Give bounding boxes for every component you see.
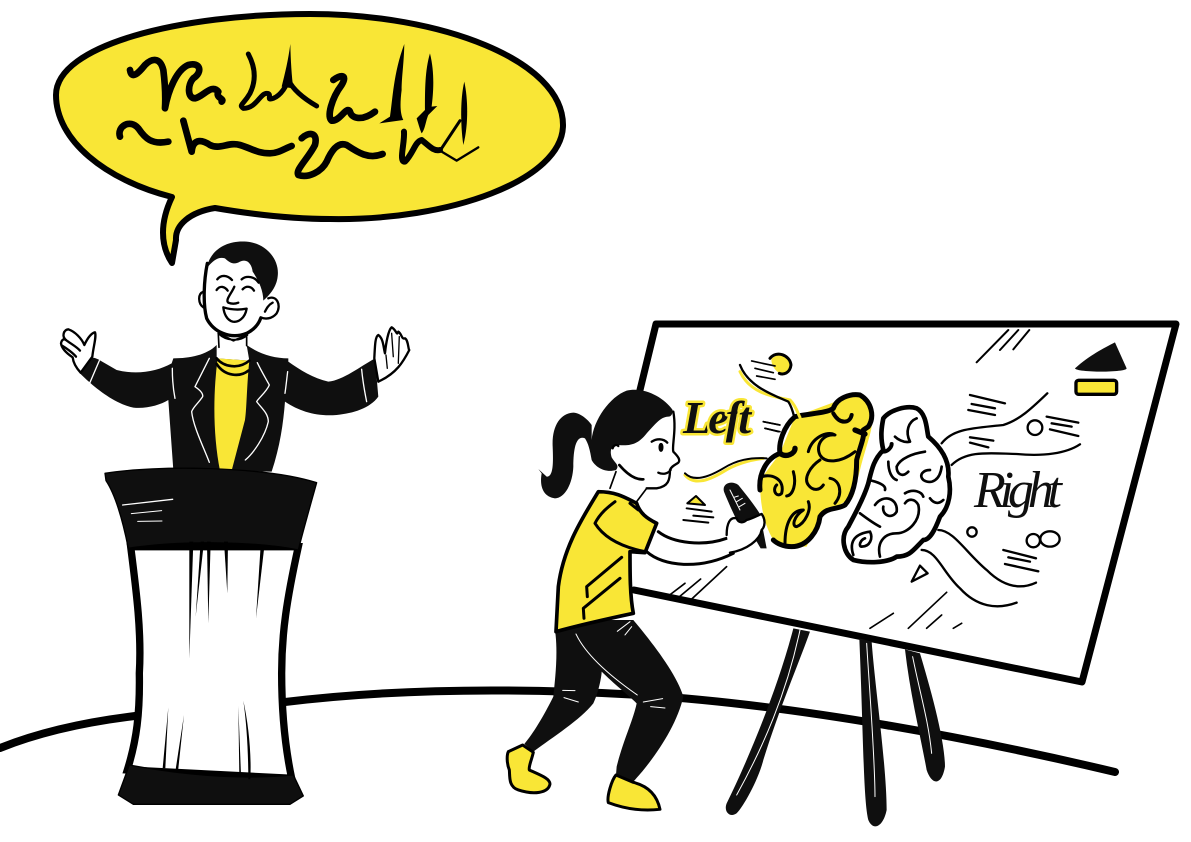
presentation board — [634, 324, 1176, 682]
presenter man — [61, 241, 409, 472]
right connectors — [942, 393, 1047, 443]
hatch marks — [668, 422, 780, 600]
head and face — [199, 241, 279, 347]
diagram lines and marks on board — [740, 353, 1080, 628]
legs and shoes — [507, 620, 683, 810]
right brain lobe — [844, 407, 950, 562]
Right label: Right — [973, 462, 1064, 519]
podium — [105, 468, 317, 804]
right lobe swirls — [852, 418, 943, 557]
left lobe swirls — [762, 413, 865, 543]
artist woman — [507, 390, 780, 810]
face — [610, 412, 679, 502]
yellow dot icon — [770, 353, 791, 374]
yellow connector — [740, 365, 800, 417]
ponytail and hair — [538, 390, 673, 498]
left brain lobe — [760, 395, 873, 547]
podium base — [118, 765, 303, 804]
small circles — [967, 420, 1060, 547]
easel legs — [726, 628, 945, 826]
ground line — [0, 690, 1115, 772]
podium highlights — [123, 499, 173, 521]
yellow wave line — [685, 458, 767, 481]
Left label: Left — [682, 392, 752, 443]
board icon: house shape — [1075, 342, 1127, 394]
triangle — [912, 566, 928, 582]
scribbled speech text — [119, 44, 478, 176]
speech bubble — [56, 14, 563, 263]
shirt — [556, 492, 657, 632]
jacket highlights — [89, 358, 367, 462]
hands — [61, 327, 409, 382]
small triangle mark — [683, 496, 713, 523]
podium folds — [163, 542, 264, 779]
hatch marks top right — [977, 330, 1029, 362]
shirt — [214, 345, 249, 471]
podium top band — [105, 468, 317, 550]
jacket — [80, 345, 378, 472]
arm and hand — [647, 483, 767, 564]
